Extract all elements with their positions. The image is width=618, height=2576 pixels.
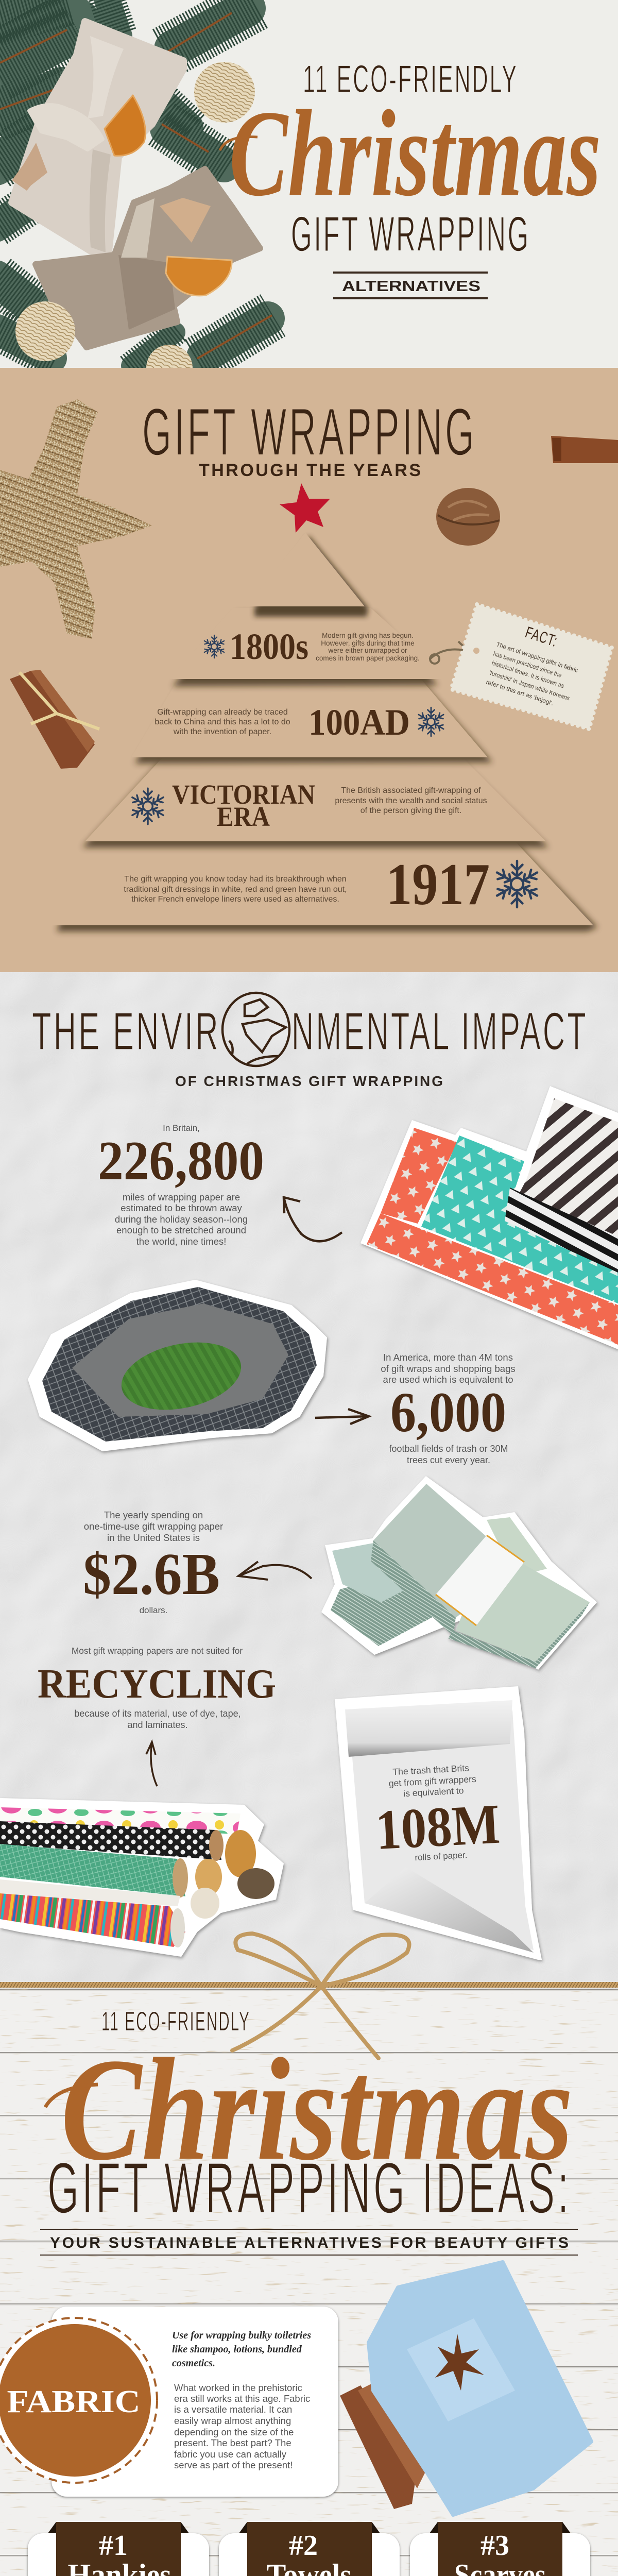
photo: wrapping paper rolls (0, 1798, 284, 1957)
photo: blue fabric wrapped gift with cinnamon and star anise (340, 2262, 591, 2515)
stat: 226,800 miles (98, 1123, 264, 1247)
stat: 6,000 football fields: of gift wraps and shopping bags (381, 1363, 516, 1374)
icon: cinnamon bundle (10, 670, 99, 769)
badge: fabric (0, 2317, 158, 2483)
icon: wicker ball 3 (146, 345, 193, 368)
heading: The Environmental Impact: THE ENVIR (32, 1002, 220, 1061)
timeline item: 1800s: comes in brown paper packaging. (316, 654, 420, 662)
timeline item: 100AD: Gift-wrapping can already be traced (157, 708, 288, 717)
panel: gift wrapping through the years (0, 368, 618, 972)
icon: dried orange slice 2 (166, 257, 232, 296)
icon: wicker ball (194, 62, 255, 123)
icon: wooden tree tag (12, 143, 47, 191)
arrow: toward $2.6B (238, 1562, 312, 1580)
timeline item: 1800s: 1800s (230, 626, 308, 667)
stat: 6,000 football fields: are used which is equivalent to (383, 1374, 513, 1385)
timeline item: 1800s: However, gifts during that time (321, 639, 415, 647)
stat: $2.6B dollars: The yearly spending on (104, 1510, 203, 1520)
card: fabric description: era still works at this age. Fabric (174, 2393, 310, 2404)
timeline item: 100AD (154, 702, 445, 743)
card: fabric description: present. The best part? The (174, 2437, 291, 2448)
stat: recycling: because of its material, use of dye, tape, (74, 1708, 241, 1719)
stat: $2.6B dollars: in the United States is (107, 1532, 200, 1543)
timeline item: 1917: thicker French envelope liners were used as alternatives. (131, 895, 339, 904)
timeline item: 100AD: 100AD (308, 702, 410, 743)
callout: fact tag: historical times. It is known as (491, 659, 565, 689)
callout: paper scroll with 108M rolls: The trash that Brits (392, 1762, 470, 1777)
card: fabric description: easily wrap almost anything (174, 2415, 291, 2426)
icon: cinnamon stick (551, 436, 618, 463)
stat: 226,800 miles: In Britain, (163, 1123, 200, 1133)
card: #2 Towels: #2 (289, 2530, 318, 2562)
card: fabric description: depending on the size of the (174, 2427, 294, 2437)
timeline item: 1917: traditional gift dressings in white, red and green have run out, (124, 885, 347, 894)
photo: football stadium (28, 1280, 327, 1451)
timeline item: 1800s: were either unwrapped or (328, 647, 407, 654)
icon: straw star (0, 399, 152, 639)
timeline item: 100AD: back to China and this has a lot to do (154, 718, 290, 726)
stat: 226,800 miles: the world, nine times! (136, 1236, 226, 1247)
callout: paper scroll with 108M rolls: is equivalent to (403, 1785, 464, 1799)
arrow: toward 226,800 (284, 1197, 342, 1241)
timeline item: Victorian Era: VICTORIAN (172, 779, 315, 810)
icon: globe (222, 993, 289, 1066)
icon: red star (280, 483, 330, 533)
callout: fact tag: The art of wrapping gifts in fabric (495, 641, 579, 674)
panel: hero (0, 0, 618, 368)
arrow: toward 6,000 (315, 1409, 369, 1424)
timeline item: 1917: The gift wrapping you know today had its breakthrough when (124, 875, 347, 884)
stat: $2.6B dollars: dollars. (140, 1605, 167, 1615)
subtitle: Alternatives: ALTERNATIVES (342, 278, 480, 295)
card: fabric description: is a versatile material. It can (174, 2404, 292, 2415)
card: fabric description (52, 2307, 338, 2497)
stat: 226,800 miles: miles of wrapping paper are (123, 1192, 240, 1202)
timeline item: Victorian Era: ERA (217, 801, 270, 832)
stat: 226,800 miles: during the holiday season--long (115, 1214, 248, 1225)
panel: gift wrapping ideas (0, 1934, 618, 2576)
stat: 226,800 miles: enough to be stretched around (116, 1225, 246, 1235)
arrow: up toward recycling (146, 1742, 157, 1786)
card: #1 Hankies: #1 (99, 2530, 128, 2562)
card: #1 Hankies (28, 2522, 209, 2576)
stat: $2.6B dollars: one-time-use gift wrapping paper (84, 1521, 223, 1532)
timeline item: 1800s: Modern gift-giving has begun. (322, 632, 414, 639)
stat: $2.6B dollars (83, 1510, 223, 1615)
timeline item: 100AD: with the invention of paper. (173, 727, 271, 736)
callout: fact tag (430, 604, 612, 729)
timeline item: 1917 (124, 852, 540, 917)
heading: 11 Eco-Friendly: 11 ECO-FRIENDLY (101, 2007, 250, 2037)
card: #2 Towels (219, 2522, 400, 2576)
icon: beige wrapped gift (12, 22, 183, 256)
stat: 6,000 football fields: trees cut every year. (407, 1455, 490, 1465)
stat: recycling: Most gift wrapping papers are not suited for (72, 1646, 243, 1656)
timeline item: 1800s (203, 626, 420, 667)
icon: twine rope and bow (0, 1934, 618, 2058)
chart: paper Christmas tree timeline (36, 533, 597, 931)
card: fabric description: Use for wrapping bulky toiletries (172, 2330, 311, 2341)
subtitle: Alternatives (333, 272, 488, 299)
section: fabric (0, 2262, 591, 2515)
stat: 6,000 football fields: football fields of trash or 30M (389, 1444, 508, 1454)
stat: $2.6B dollars: $2.6B (83, 1541, 220, 1607)
callout: paper scroll with 108M rolls: rolls of paper. (415, 1850, 468, 1862)
photo: wrapping paper sheets (360, 1086, 618, 1349)
card: fabric description: like shampoo, lotions, bundled (172, 2344, 302, 2355)
icon: dried orange slice (105, 95, 145, 156)
callout: fact tag: FACT: (523, 623, 560, 650)
card: fabric description: fabric you use can actually (174, 2449, 287, 2460)
card: fabric description: What worked in the prehistoric (174, 2382, 302, 2393)
callout: fact tag: 'furoshiki' in Japan while Koreans (488, 669, 571, 702)
timeline item: Victorian Era: of the person giving the gift. (360, 806, 461, 815)
callout: paper scroll with 108M rolls: get from gift wrappers (388, 1774, 476, 1789)
card: fabric description: serve as part of the present! (174, 2460, 293, 2470)
stat: 226,800 miles: 226,800 (98, 1130, 264, 1192)
photo: stacks of money (321, 1476, 597, 1670)
card: #3 Scarves (410, 2522, 590, 2576)
panel: the environmental impact (0, 972, 618, 1992)
timeline item: 1917: 1917 (386, 852, 490, 917)
timeline item: Victorian Era (130, 779, 487, 832)
card: fabric description: cosmetics. (172, 2358, 215, 2369)
stat: 6,000 football fields: In America, more than 4M tons (383, 1352, 513, 1363)
heading: The Environmental Impact: O (235, 1002, 277, 1061)
heading: The Environmental Impact (32, 993, 588, 1066)
subtitle: Of Christmas Gift Wrapping: OF CHRISTMAS GIFT WRAPPING (175, 1073, 443, 1089)
card: #3 Scarves: #3 (480, 2530, 509, 2562)
callout: fact tag: has been practiced since the (492, 650, 563, 679)
timeline item: Victorian Era: presents with the wealth and social status (335, 796, 487, 805)
subtitle: Through the Years: THROUGH THE YEARS (199, 461, 421, 480)
callout: paper scroll with 108M rolls (335, 1686, 542, 1960)
stat: recycling (38, 1646, 276, 1730)
icon: gift knot (29, 105, 102, 149)
callout: paper scroll with 108M rolls: 108M (374, 1792, 501, 1861)
callout: fact tag: refer to this art as 'bojagi'. (485, 679, 555, 707)
stat: 6,000 football fields (381, 1352, 516, 1465)
subtitle: Your sustainable alternatives for beauty gifts: YOUR SUSTAINABLE ALTERNATIVES FOR BEAUTY GIFTS (50, 2234, 569, 2251)
icon: wicker ball 2 (15, 301, 75, 361)
photo: pine branches, fabric-wrapped gifts, orange slices and wicker balls (0, 0, 273, 368)
stat: 6,000 football fields: 6,000 (390, 1381, 506, 1444)
icon: wooden tree tag 2 (160, 198, 211, 243)
timeline item: Victorian Era: The British associated gift-wrapping of (341, 786, 481, 795)
icon: walnut (436, 488, 500, 546)
icon: taupe wrapped gift (36, 169, 260, 347)
badge: fabric: FABRIC (7, 2384, 140, 2419)
stat: recycling: and laminates. (127, 1720, 188, 1730)
stat: 226,800 miles: estimated to be thrown away (121, 1202, 242, 1213)
stat: recycling: RECYCLING (38, 1662, 276, 1707)
